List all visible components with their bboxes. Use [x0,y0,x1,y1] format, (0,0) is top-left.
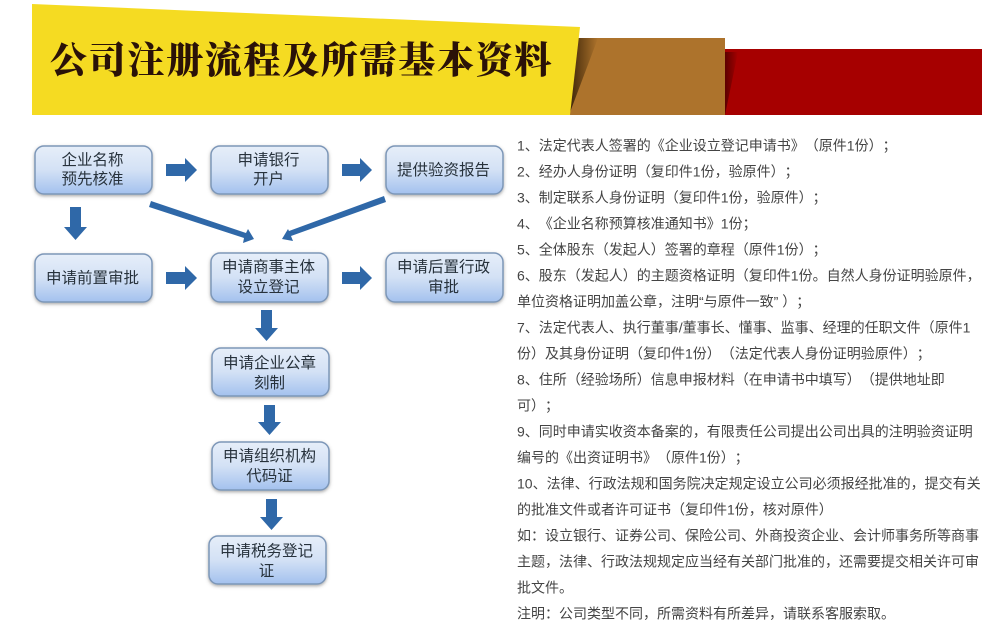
box: 申请税务登记证 [209,536,326,584]
arrow: right 4 [342,266,372,290]
requirements list: 7、法定代表人、执行董事/董事长、懂事、监事、经理的任职文件（原件1 [517,320,971,336]
requirements list: 可）； [517,398,559,414]
box: 企业名称预先核准 [35,146,152,194]
arrow: right 1 [166,158,197,182]
arrow: down to 组织机构 [258,405,281,435]
requirements list: 1、法定代表人签署的《企业设立登记申请书》（原件1份）； [517,138,897,154]
requirements list: 编号的《出资证明书》（原件1份）； [517,450,749,466]
box: 申请企业公章刻制 [212,348,329,396]
requirements list: 9、同时申请实收资本备案的，有限责任公司提出公司出具的注明验资证明 [517,424,973,440]
box: 企业名称预先核准: 企业名称 [61,151,124,169]
box: 申请后置行政审批: 申请后置行政 [397,258,490,276]
requirements list: 注明：公司类型不同，所需资料有所差异，请联系客服索取。 [517,606,895,622]
requirements list: 份）及其身份证明（复印件1份）（法定代表人身份证明验原件）； [517,346,931,362]
arrow: down to 公章 [255,310,278,341]
box: 提供验资报告 [386,146,503,194]
arrow: diagonal from 验资报告 [282,196,386,241]
brown ribbon [569,38,725,115]
box: 申请企业公章刻制: 申请企业公章 [223,354,316,372]
arrow: down to 前置审批 [64,207,87,240]
flowchart [35,146,503,584]
box: 申请后置行政审批: 审批 [428,278,459,296]
requirements list [517,138,981,622]
requirements list: 如：设立银行、证券公司、保险公司、外商投资企业、会计师事务所等商事 [517,528,979,544]
box: 申请银行开户: 开户 [253,170,284,188]
yellow ribbon [32,4,580,115]
box: 申请商事主体设立登记: 设立登记 [237,278,300,296]
box: 申请组织机构代码证: 申请组织机构 [223,447,316,465]
box: 申请税务登记证: 证 [259,562,274,580]
requirements list: 5、全体股东（发起人）签署的章程（原件1份）； [517,242,827,258]
requirements list: 6、股东（发起人）的主题资格证明（复印件1份。自然人身份证明验原件， [517,268,981,284]
arrow: diagonal from 名称核准 [149,201,254,243]
box: 申请企业公章刻制: 刻制 [254,374,285,392]
box: 申请组织机构代码证 [212,442,329,490]
box: 申请前置审批: 申请前置审批 [46,269,139,287]
red ribbon [725,49,982,115]
requirements list: 3、制定联系人身份证明（复印件1份，验原件）； [517,190,827,206]
arrow: right 2 [342,158,372,182]
requirements list: 2、经办人身份证明（复印件1份，验原件）； [517,164,799,180]
arrow: right 3 [166,266,197,290]
requirements list: 4、《企业名称预算核准通知书》1份； [517,216,757,232]
box: 申请银行开户 [211,146,328,194]
requirements list: 单位资格证明加盖公章，注明“与原件一致” ）； [517,294,810,310]
requirements list: 10、法律、行政法规和国务院决定规定设立公司必须报经批准的，提交有关 [517,476,981,492]
box: 申请银行开户: 申请银行 [237,151,300,169]
box: 申请后置行政审批 [386,253,503,302]
box: 申请组织机构代码证: 代码证 [246,467,293,485]
box: 申请前置审批 [35,254,152,302]
box: 提供验资报告: 提供验资报告 [397,161,490,179]
box: 申请商事主体设立登记 [211,253,328,302]
arrow: down to 税务登记 [260,499,283,530]
banner [32,4,982,115]
requirements list: 8、住所（经验场所）信息申报材料（在申请书中填写）（提供地址即 [517,372,945,388]
box: 企业名称预先核准: 预先核准 [61,170,124,188]
requirements list: 主题，法律、行政法规规定应当经有关部门批准的，还需要提交相关许可审 [517,554,979,570]
box: 申请商事主体设立登记: 申请商事主体 [222,258,315,276]
requirements list: 批文件。 [517,580,573,596]
box: 申请税务登记证: 申请税务登记 [220,542,313,560]
requirements list: 的批准文件或者许可证书（复印件1份，核对原件） [517,502,833,518]
title: 公司注册流程及所需基本资料 [50,40,553,82]
